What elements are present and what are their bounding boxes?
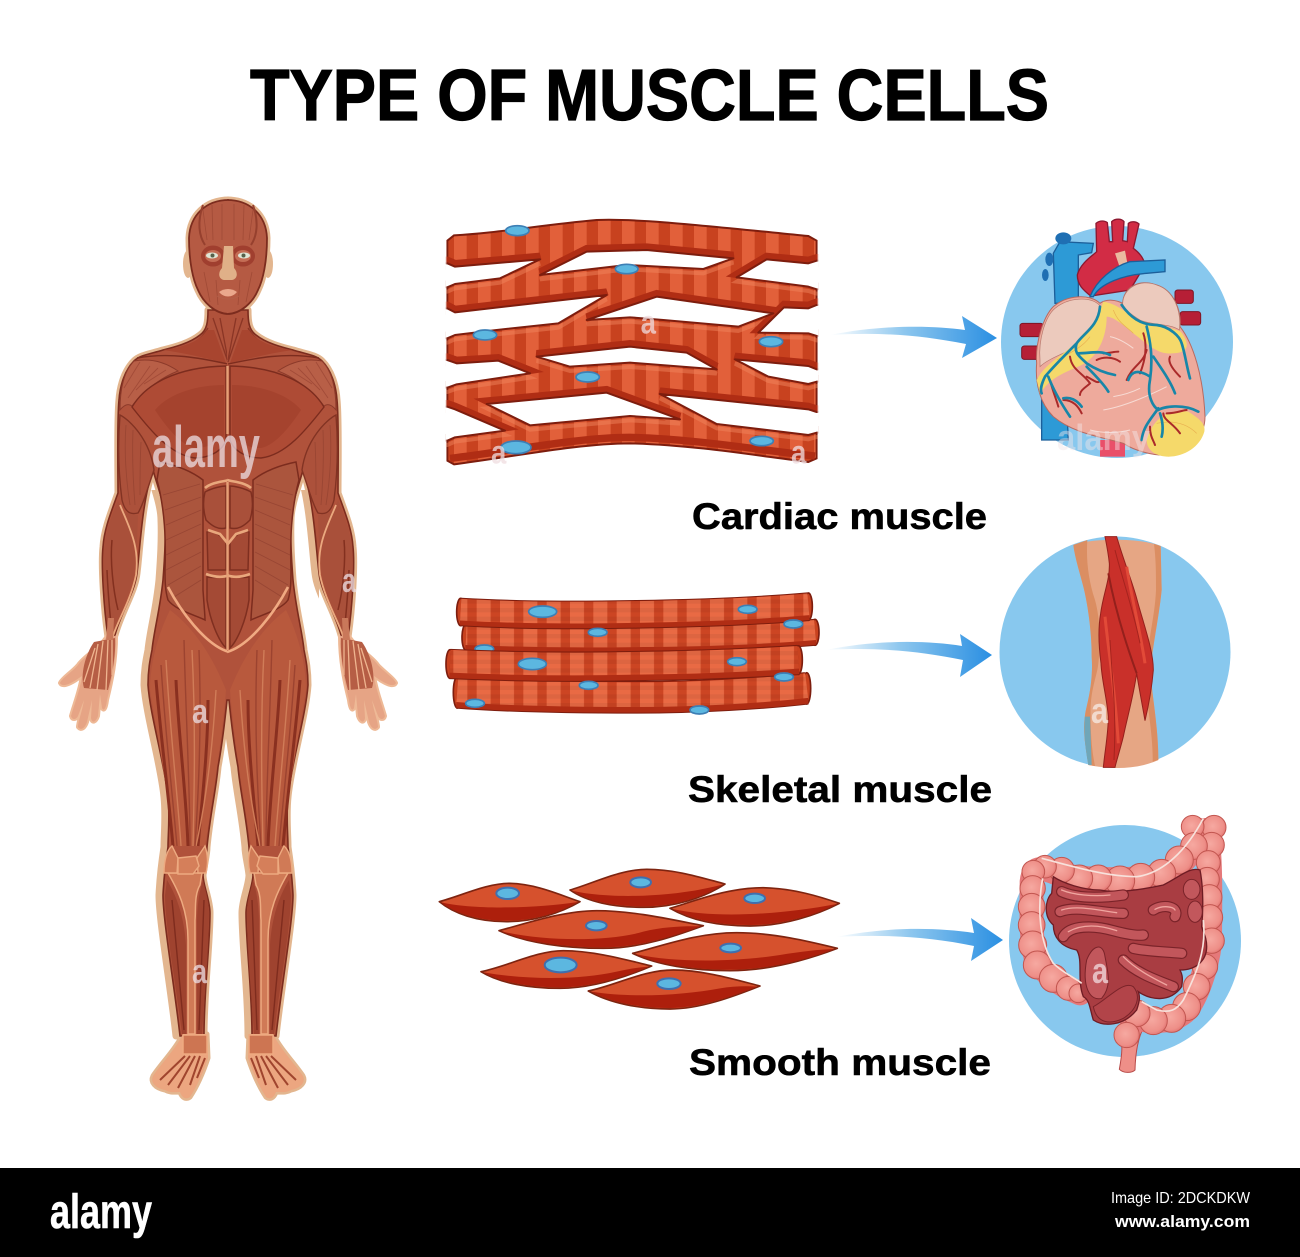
cardiac muscle cells: a [491, 434, 507, 471]
leg muscle illustration in blue circle [1000, 536, 1230, 768]
intestine watermark: a [1092, 950, 1109, 991]
watermark on body: alamy [152, 415, 260, 480]
nuclei [466, 605, 803, 714]
intestines illustration in blue circle [1009, 815, 1241, 1072]
footer logo: alamy [50, 1186, 152, 1239]
small watermarks on body [192, 562, 357, 991]
label: smooth muscle: Smooth muscle [689, 1042, 991, 1083]
heart watermark: alamy [1057, 417, 1150, 458]
title: TYPE OF MUSCLE CELLS [250, 56, 1049, 136]
small watermarks on body: a [192, 693, 209, 731]
cardiac muscle cells: a [641, 304, 656, 341]
skeletal arrow [826, 634, 992, 677]
small watermarks on body: a [192, 953, 208, 991]
cardiac muscle cells: a [791, 434, 807, 471]
small watermarks on body: a [342, 562, 357, 600]
image id: Image ID: 2DCKDKW [1111, 1190, 1251, 1207]
heart illustration in blue circle [1001, 219, 1233, 458]
label: cardiac muscle: Cardiac muscle [692, 496, 987, 537]
footer bar [0, 1168, 1300, 1257]
label: skeletal muscle: Skeletal muscle [688, 769, 992, 810]
smooth muscle cells [439, 869, 839, 1009]
smooth arrow [836, 918, 1003, 961]
nuclei [473, 226, 783, 454]
nuclei [496, 877, 765, 989]
cardiac arrow [830, 316, 997, 358]
cardiac muscle cells [445, 218, 819, 466]
human muscular body figure [60, 200, 396, 1098]
face nose and lips [217, 246, 239, 299]
skeletal muscle cells [446, 593, 819, 714]
website: www.alamy.com [1114, 1212, 1250, 1231]
leg watermark: a [1091, 690, 1109, 731]
